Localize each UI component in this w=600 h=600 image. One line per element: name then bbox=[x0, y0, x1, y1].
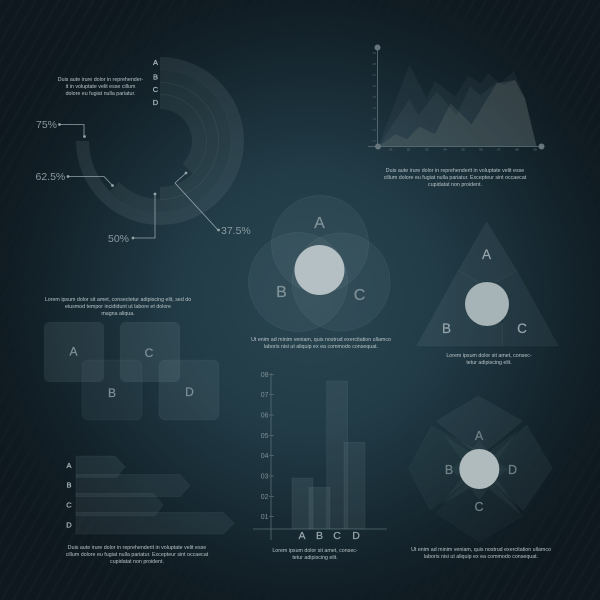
y axis labels: 02 bbox=[261, 494, 269, 501]
donut letters: A bbox=[153, 58, 158, 67]
donut caption: dolore eu fugiat nulla pariatur. bbox=[66, 91, 135, 97]
venn caption bbox=[251, 337, 391, 350]
arrow letters: D bbox=[66, 520, 72, 530]
star rays bbox=[440, 430, 522, 515]
triangle caption bbox=[446, 353, 532, 366]
y axis labels: 07 bbox=[373, 73, 376, 77]
bar caption bbox=[272, 548, 358, 561]
squares caption: Lorem ipsum dolor sit amet, consectetur adipiscing elit, sed do bbox=[45, 297, 191, 303]
leader lines bbox=[60, 124, 218, 238]
areas bbox=[378, 64, 537, 147]
arrow caption: Duis aute irure dolor in reprehenderit in voluptate velit esse bbox=[68, 545, 206, 551]
x axis labels: 06 bbox=[479, 148, 483, 152]
venn letters: C bbox=[354, 287, 365, 304]
triangle letters: C bbox=[517, 321, 527, 336]
arrow A bbox=[76, 456, 125, 477]
petal A bbox=[436, 396, 523, 457]
donut chart bbox=[36, 57, 251, 245]
square letters bbox=[69, 344, 194, 400]
petal letters bbox=[445, 429, 517, 514]
arrow bars bbox=[66, 456, 234, 565]
segment A bbox=[458, 222, 517, 283]
square D bbox=[159, 360, 219, 420]
segment C bbox=[495, 271, 558, 346]
x axis labels: 04 bbox=[443, 148, 447, 152]
rounded squares bbox=[44, 297, 219, 420]
bar letters: D bbox=[352, 530, 360, 542]
x axis labels: 05 bbox=[461, 148, 465, 152]
donut letters: D bbox=[153, 98, 159, 107]
venn letters: A bbox=[314, 215, 325, 232]
square letters: D bbox=[185, 385, 194, 399]
x axis labels: 07 bbox=[497, 148, 501, 152]
arrow D bbox=[76, 512, 234, 534]
donut ring D bbox=[160, 94, 207, 174]
leader dots bbox=[58, 123, 220, 239]
arrow letters bbox=[66, 461, 72, 530]
square letters: A bbox=[69, 344, 78, 358]
percentage labels: 75% bbox=[36, 119, 57, 131]
circle B bbox=[248, 232, 348, 332]
centre circle bbox=[294, 245, 344, 295]
petal letters: B bbox=[445, 463, 453, 477]
area chart caption: cillum dolore eu fugiat nulla pariatur. Excepteur sint occaecat bbox=[384, 175, 527, 181]
y axis labels bbox=[373, 51, 376, 143]
donut letters: B bbox=[153, 72, 158, 82]
axis end dots bbox=[374, 44, 544, 150]
bar letters bbox=[298, 530, 360, 542]
percentage labels bbox=[36, 119, 251, 245]
bar caption: tetur adipiscing elit. bbox=[292, 555, 338, 561]
area chart caption bbox=[384, 168, 527, 188]
y axis labels: 03 bbox=[261, 474, 269, 480]
arrow caption: cupidatat non proident. bbox=[110, 559, 164, 565]
percentage labels: 62.5% bbox=[36, 171, 65, 183]
bar axes bbox=[253, 373, 387, 540]
y axis labels: 09 bbox=[373, 51, 376, 55]
petal caption: laboris nisi ut aliquip ex ea commodo consequat. bbox=[424, 554, 538, 560]
bar letters: C bbox=[333, 530, 341, 542]
arrow C bbox=[76, 493, 163, 516]
y axis labels: 06 bbox=[261, 412, 269, 420]
squares caption: eiusmod tempor incididunt ut labore et dolore bbox=[65, 304, 171, 310]
square A bbox=[44, 322, 104, 382]
venn caption: Ut enim ad minim veniam, quis nostrud exercitation ullamco bbox=[251, 337, 391, 343]
bar caption: Lorem ipsum dolor sit amet, consec- bbox=[272, 548, 358, 554]
donut caption bbox=[58, 77, 143, 97]
donut letters: C bbox=[153, 85, 159, 94]
squares caption: magna aliqua. bbox=[101, 311, 135, 317]
bar letters: B bbox=[316, 530, 323, 542]
triangle letters bbox=[442, 247, 527, 336]
area chart bbox=[368, 44, 544, 188]
petal letters: D bbox=[508, 463, 517, 477]
petal caption: Ut enim ad minim veniam, quis nostrud exercitation ullamco bbox=[411, 547, 551, 553]
y axis labels: 06 bbox=[373, 84, 376, 88]
arrow B bbox=[76, 474, 190, 497]
squares caption bbox=[45, 297, 191, 317]
donut ring A bbox=[76, 57, 244, 225]
axes bbox=[368, 47, 541, 147]
petal B bbox=[408, 426, 480, 510]
triangle letters: B bbox=[442, 321, 451, 336]
triangle diagram bbox=[417, 222, 558, 366]
venn caption: laboris nisi ut aliquip ex ea commodo consequat. bbox=[264, 344, 378, 350]
y axis labels: 08 bbox=[261, 372, 269, 379]
segment B bbox=[417, 271, 503, 346]
bar chart bbox=[253, 372, 387, 561]
x axis labels: 09 bbox=[533, 148, 537, 152]
y axis labels: 02 bbox=[373, 128, 376, 132]
donut caption: Duis aute irure dolor in reprehender- bbox=[58, 77, 143, 83]
circle C bbox=[292, 233, 390, 331]
y axis labels: 07 bbox=[261, 392, 269, 399]
square letters: B bbox=[108, 386, 116, 400]
triangle caption: Lorem ipsum dolor sit amet, consec- bbox=[446, 353, 532, 359]
x axis labels: 08 bbox=[515, 148, 519, 152]
arrow letters: A bbox=[66, 461, 72, 470]
square C bbox=[120, 322, 180, 382]
bar letters: A bbox=[298, 530, 306, 542]
area chart caption: cupidatat non proident. bbox=[428, 182, 482, 188]
y axis labels: 05 bbox=[373, 95, 376, 99]
y axis labels: 08 bbox=[373, 62, 376, 66]
x axis labels: 03 bbox=[425, 148, 429, 152]
donut ring C bbox=[160, 82, 219, 200]
square letters: C bbox=[145, 346, 154, 360]
centre circle bbox=[465, 282, 509, 326]
x axis labels bbox=[389, 148, 537, 152]
area chart caption: Duis aute irure dolor in reprehenderit in voluptate velit esse bbox=[386, 168, 524, 174]
y axis labels: 01 bbox=[261, 514, 269, 521]
percentage labels: 50% bbox=[108, 233, 129, 245]
donut ring B bbox=[110, 70, 231, 212]
y axis labels bbox=[261, 372, 269, 521]
y axis labels: 01 bbox=[373, 139, 376, 143]
arrow caption bbox=[66, 545, 209, 565]
donut caption: it in voluptate velit esse cillum bbox=[66, 84, 136, 90]
percentage labels: 37.5% bbox=[221, 225, 251, 237]
x axis labels: 02 bbox=[407, 148, 410, 152]
triangle caption: tetur adipiscing elit. bbox=[466, 360, 512, 366]
triangle letters: A bbox=[482, 247, 491, 262]
petal diagram bbox=[408, 396, 552, 560]
y axis labels: 05 bbox=[261, 433, 269, 440]
petal letters: A bbox=[475, 429, 484, 443]
square B bbox=[82, 360, 142, 420]
venn letters: B bbox=[276, 284, 287, 301]
arrow caption: cillum dolore eu fugiat nulla pariatur. Excepteur sint occaecat bbox=[66, 552, 209, 558]
petal caption bbox=[411, 547, 551, 560]
y axis labels: 03 bbox=[373, 117, 376, 121]
y axis labels: 04 bbox=[261, 453, 269, 460]
arrow letters: B bbox=[66, 480, 72, 490]
venn letters bbox=[276, 215, 365, 304]
bars bbox=[292, 381, 365, 529]
donut letters bbox=[153, 58, 159, 107]
x axis labels: 01 bbox=[389, 148, 393, 152]
venn diagram bbox=[248, 196, 391, 350]
petal C bbox=[436, 469, 523, 542]
petal D bbox=[479, 425, 552, 511]
centre circle bbox=[459, 449, 499, 489]
y axis labels: 04 bbox=[373, 106, 376, 110]
circle A bbox=[272, 196, 368, 292]
petal letters: C bbox=[474, 500, 484, 514]
arrow letters: C bbox=[66, 500, 72, 510]
